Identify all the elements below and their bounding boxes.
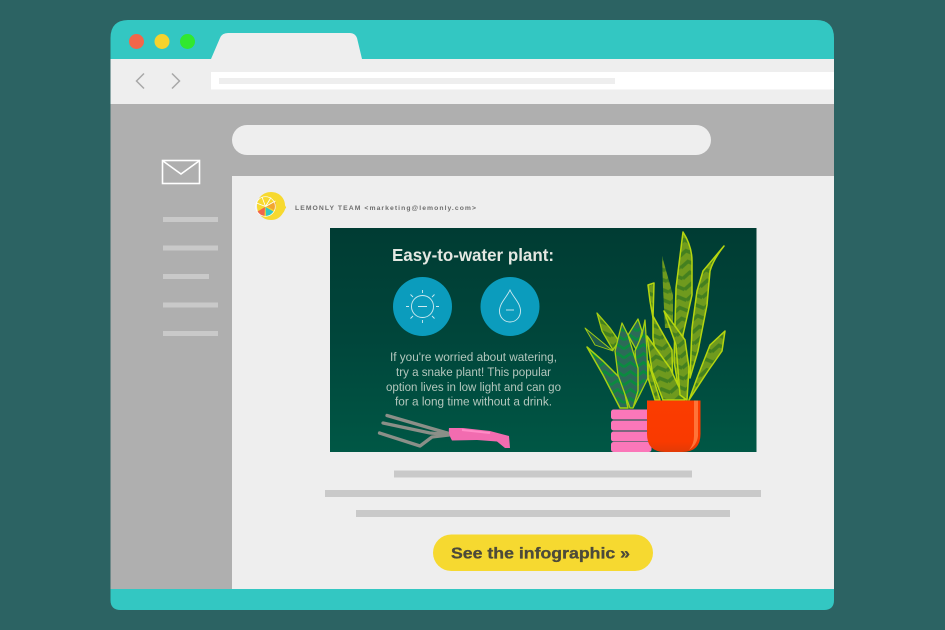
search pill (232, 125, 711, 155)
card body text: If you're worried about watering, (390, 350, 557, 364)
call to action button: See the infographic » (451, 546, 630, 562)
card body text: try a snake plant! This popular (396, 365, 551, 379)
email text lines (325, 470, 761, 517)
toolbar (110, 59, 834, 104)
browser bottom bar (110, 589, 834, 610)
logo: lemon (256, 192, 286, 220)
icon: water drop (480, 277, 540, 336)
email panel (232, 176, 834, 589)
sender line: LEMONLY TEAM <marketing@lemonly.com> (295, 205, 476, 212)
browser top bar (110, 20, 834, 59)
browser window (110, 20, 834, 610)
pink pot (611, 410, 652, 452)
sidebar menu lines (163, 217, 218, 336)
icon: garden fork (380, 416, 510, 448)
plant: large snake plant (647, 232, 725, 400)
icon: sun (393, 277, 452, 336)
card body text: for a long time without a drink. (395, 394, 552, 408)
window buttons (129, 34, 195, 49)
back arrow (136, 74, 144, 88)
call to action button (433, 534, 653, 571)
email image card (330, 228, 756, 452)
browser tab (211, 33, 362, 59)
red pot (647, 400, 700, 452)
plant: small snake plant (585, 313, 648, 408)
mail icon (162, 160, 200, 184)
address bar (211, 72, 834, 90)
card heading: Easy-to-water plant: (392, 245, 554, 265)
sidebar and header background (110, 104, 834, 589)
card body text: option lives in low light and can go (386, 380, 561, 394)
card body text (386, 350, 561, 408)
forward arrow (172, 74, 180, 88)
